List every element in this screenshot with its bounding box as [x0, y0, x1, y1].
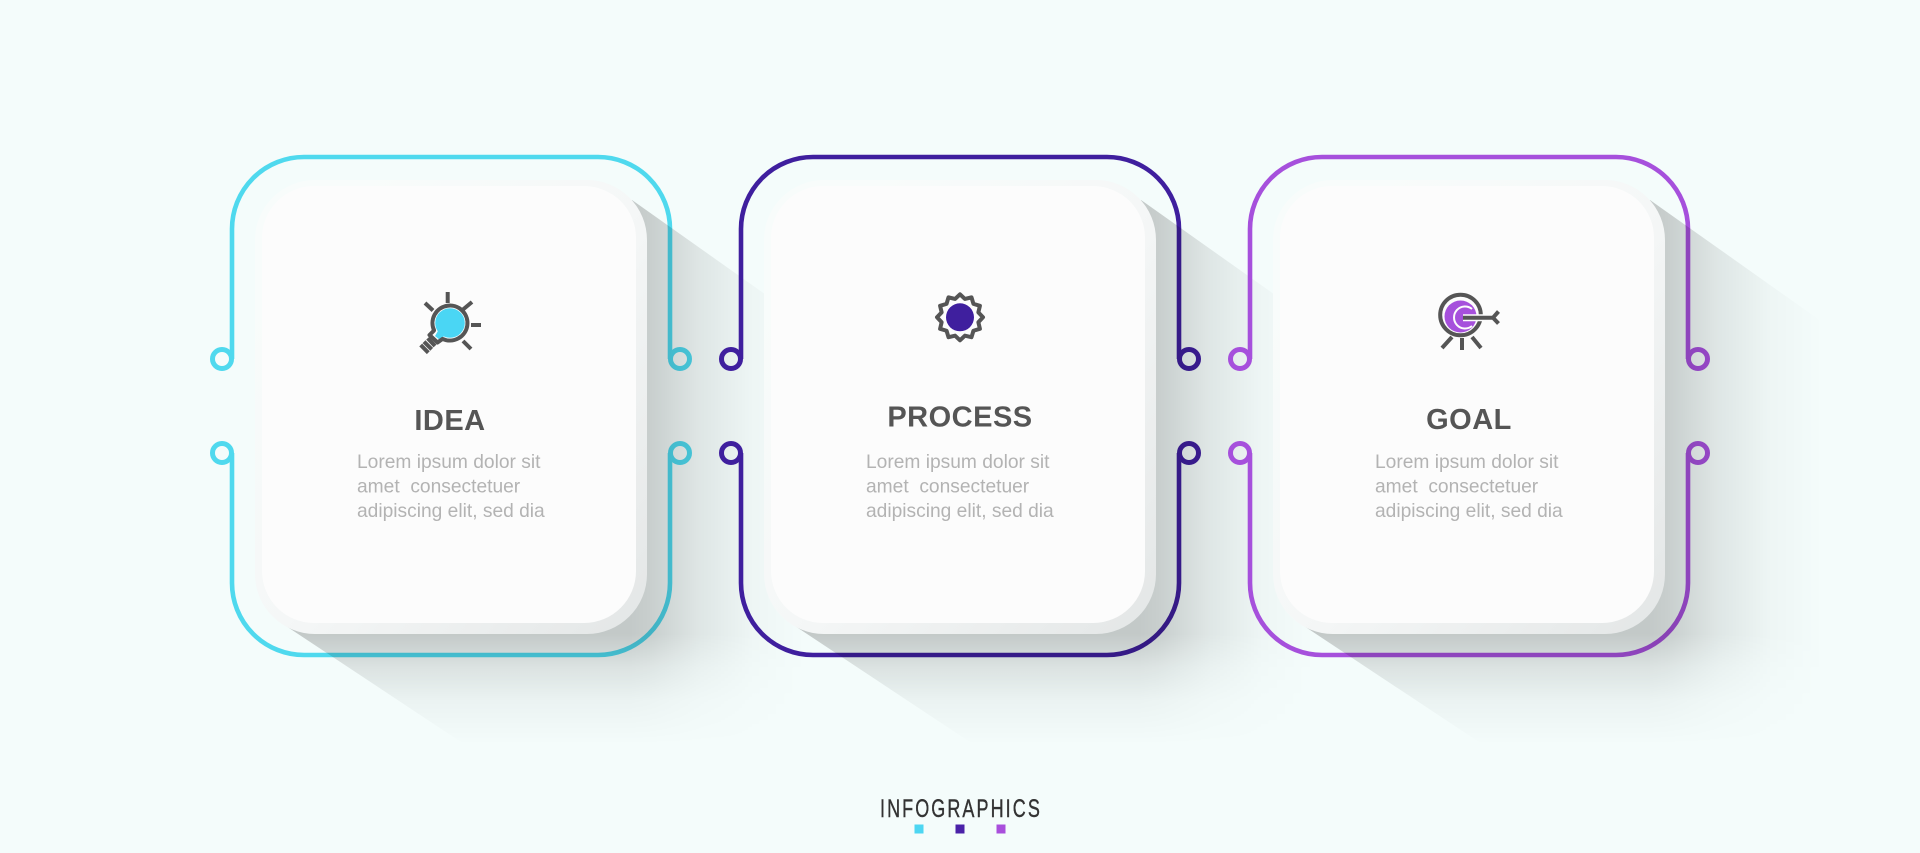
text block: idea: adipiscing elit, sed dia: [357, 501, 545, 522]
panel: idea: [210, 154, 745, 704]
idea long shadow: [288, 200, 745, 704]
idea card: [255, 180, 647, 634]
text block: goal: [1375, 452, 1563, 522]
panel: process: [719, 154, 1254, 704]
text block: goal: amet consectetuer: [1375, 476, 1539, 498]
text block: idea: Lorem ipsum dolor sit: [357, 452, 541, 473]
text block: process: adipiscing elit, sed dia: [866, 501, 1054, 522]
goal outline with connector loops: [1230, 157, 1708, 655]
text block: process: Lorem ipsum dolor sit: [866, 452, 1050, 473]
heading: goal: GOAL: [1426, 404, 1512, 436]
process outline with connector loops: [722, 157, 1198, 655]
text block: process: amet consectetuer: [866, 476, 1030, 498]
icon: light bulb: [421, 292, 481, 353]
idea outline with connector loops: [212, 157, 690, 655]
goal card: [1273, 180, 1665, 634]
heading: process: PROCESS: [887, 402, 1033, 434]
goal long shadow: [1306, 200, 1763, 704]
icon: gear: [937, 294, 983, 340]
text block: idea: [357, 452, 545, 522]
icon: target: [1440, 295, 1498, 350]
heading: idea: IDEA: [414, 405, 486, 437]
process card: [764, 180, 1156, 634]
process long shadow: [798, 200, 1254, 704]
panel: goal: [1228, 154, 1763, 704]
footer title: INFOGRAPHICS: [880, 794, 1040, 823]
text block: idea: amet consectetuer: [357, 476, 521, 498]
text block: goal: adipiscing elit, sed dia: [1375, 501, 1563, 522]
text block: goal: Lorem ipsum dolor sit: [1375, 452, 1559, 473]
text block: process: [866, 452, 1054, 522]
footer colour legend: [914, 824, 1006, 834]
